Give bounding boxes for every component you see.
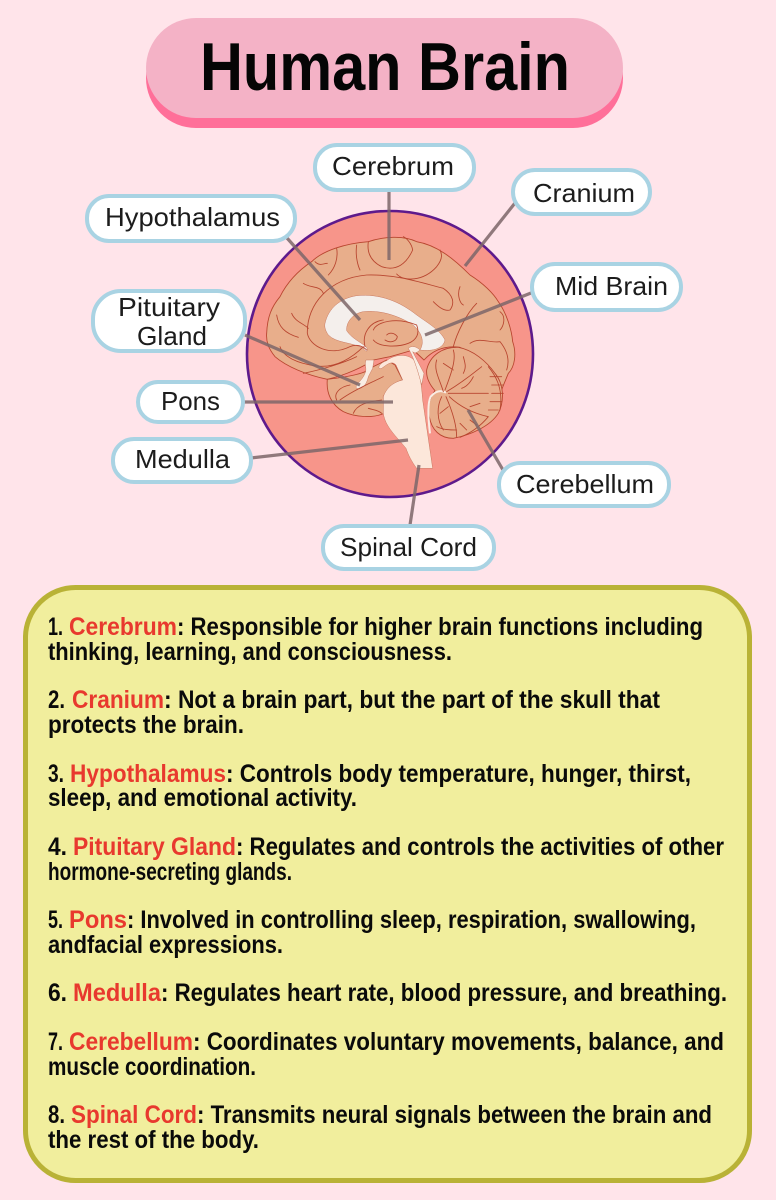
item 1: : Responsible for higher brain functions including xyxy=(177,613,703,641)
connector lines xyxy=(243,190,531,525)
item 4: 4. xyxy=(48,833,67,861)
label: Cerebellum xyxy=(499,463,669,506)
brain illustration xyxy=(267,237,515,468)
item 3: : Controls body temperature, hunger, thirst, xyxy=(226,760,691,788)
label: Pituitary Gland xyxy=(93,291,245,351)
item 2: 2. xyxy=(48,686,65,714)
item 2: protects the brain. xyxy=(48,711,244,739)
item 3 xyxy=(48,760,691,812)
label: Cranium: Cranium xyxy=(533,178,635,208)
item 3: Hypothalamus xyxy=(70,760,226,788)
background circle xyxy=(247,211,533,497)
item 5 xyxy=(48,906,696,959)
label: Pituitary Gland: Gland xyxy=(137,321,207,351)
item 8 xyxy=(48,1101,712,1154)
title xyxy=(146,18,623,128)
label: Hypothalamus: Hypothalamus xyxy=(105,202,280,232)
item 6: 6. xyxy=(48,979,67,1007)
label: Cerebellum: Cerebellum xyxy=(516,469,654,499)
item 1: Cerebrum xyxy=(69,613,177,641)
label: Spinal Cord xyxy=(323,526,494,569)
label: Mid Brain: Mid Brain xyxy=(555,271,668,301)
item 3: sleep, and emotional activity. xyxy=(48,784,357,812)
item 4: Pituitary Gland xyxy=(73,833,236,861)
item 5: Pons xyxy=(69,906,127,934)
item 6: Medulla xyxy=(73,979,162,1007)
item 4 xyxy=(48,833,724,886)
item 7: : Coordinates voluntary movements, balance, and xyxy=(193,1028,724,1056)
label: Pons: Pons xyxy=(161,386,220,416)
item 1 xyxy=(48,613,703,666)
label: Pituitary Gland: Pituitary xyxy=(118,292,220,322)
panel: descriptions xyxy=(26,588,750,1180)
label: Pons xyxy=(138,382,243,422)
item 7 xyxy=(48,1028,724,1081)
label: Cerebrum xyxy=(315,145,474,190)
item 7: Cerebellum xyxy=(69,1028,193,1056)
brain diagram xyxy=(247,211,533,497)
item 5: : Involved in controlling sleep, respiration, swallowing, xyxy=(127,906,696,934)
item 8: the rest of the body. xyxy=(48,1126,259,1154)
label: Spinal Cord: Spinal Cord xyxy=(340,532,477,562)
item 8: Spinal Cord xyxy=(71,1101,197,1129)
item 5: andfacial expressions. xyxy=(48,931,283,959)
label: Medulla: Medulla xyxy=(135,444,231,474)
item 2 xyxy=(48,686,661,739)
item 7: muscle coordination. xyxy=(48,1053,256,1081)
item 2: Cranium xyxy=(72,686,164,714)
item 4: : Regulates and controls the activities of other xyxy=(236,833,724,861)
label: Medulla xyxy=(113,439,251,482)
item 1: 1. xyxy=(48,613,63,641)
label: Mid Brain xyxy=(532,264,681,310)
item 4: hormone-secreting glands. xyxy=(48,858,292,886)
item 8: : Transmits neural signals between the brain and xyxy=(197,1101,712,1129)
label: Cranium xyxy=(513,170,650,214)
item 8: 8. xyxy=(48,1101,65,1129)
item 7: 7. xyxy=(48,1028,63,1056)
item 3: 3. xyxy=(48,760,64,788)
item 5: 5. xyxy=(48,906,63,934)
title: Human Brain xyxy=(200,29,570,105)
item 1: thinking, learning, and consciousness. xyxy=(48,638,452,666)
item 2: : Not a brain part, but the part of the skull that xyxy=(164,686,661,714)
label: Hypothalamus xyxy=(87,196,295,241)
label: Cerebrum: Cerebrum xyxy=(332,151,454,181)
